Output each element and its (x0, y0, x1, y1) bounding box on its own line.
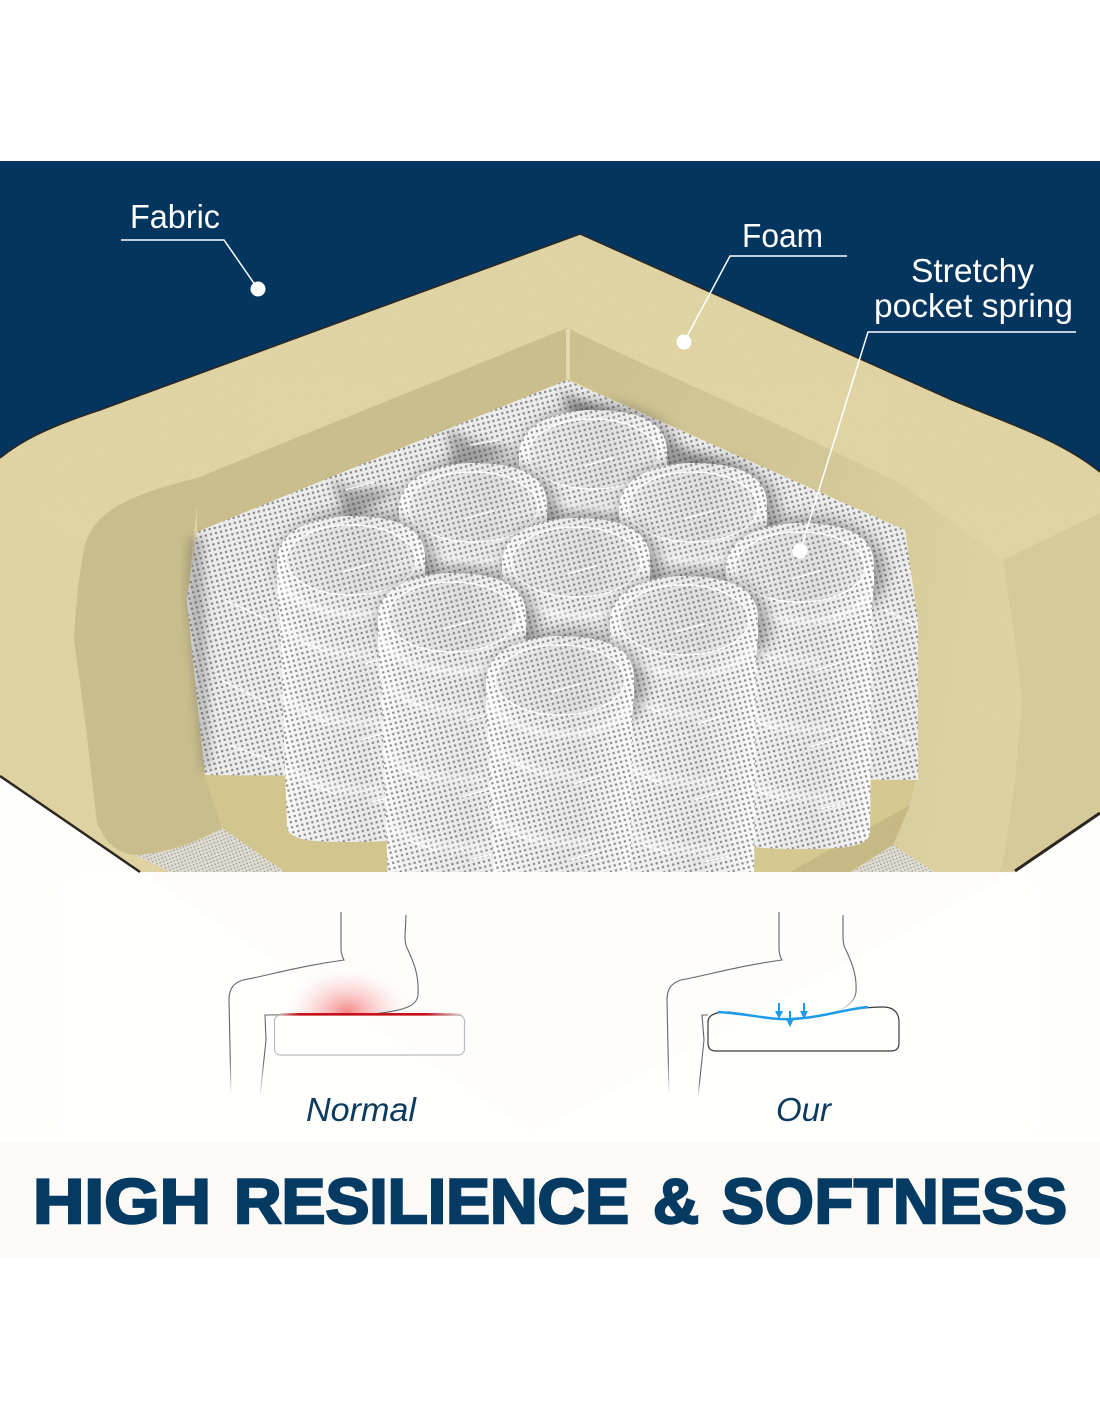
navy fabric background (0, 161, 1100, 581)
fabric under right (852, 845, 935, 872)
spring 5 (277, 510, 437, 842)
red pressure line (277, 1013, 463, 1016)
dark edge right (1015, 813, 1100, 871)
spring 1 (519, 404, 679, 736)
foam floor left (203, 772, 400, 872)
our cushion box (708, 1007, 899, 1051)
callout: Foam: Foam (742, 217, 823, 254)
callout: Fabric (121, 198, 266, 296)
normal cushion box (274, 1015, 464, 1055)
fabric under left (135, 828, 285, 872)
illustration: our cushion (667, 912, 899, 1097)
spring 8 (610, 570, 770, 902)
title: HIGH (33, 1167, 211, 1237)
spring 4 (502, 512, 662, 844)
blue arrows (775, 1003, 808, 1027)
dark edge left (0, 776, 140, 872)
title: RESILIENCE (234, 1167, 629, 1237)
foam floor right (740, 780, 916, 872)
label: Our: Our (776, 1091, 833, 1128)
title: SOFTNESS (722, 1167, 1067, 1237)
title (33, 1167, 1067, 1237)
seated figure outline (229, 912, 344, 1095)
pressure glow (296, 976, 398, 1013)
foam mattress frame (0, 234, 1100, 872)
seated figure outline (667, 912, 782, 1095)
foam top edge shadow line (0, 234, 1100, 472)
foam top surface (0, 234, 1100, 872)
callout: Fabric: Fabric (130, 198, 220, 235)
spring 6 (726, 517, 886, 849)
foam inner wall left (197, 328, 567, 532)
white side wedge (0, 777, 1100, 1142)
callout: Stretchy pocket spring: Stretchy (911, 252, 1035, 289)
foam wall corner highlight (566, 329, 570, 379)
blue wave line (718, 1007, 868, 1019)
foam inner column left (74, 478, 222, 855)
lower off-white background (0, 776, 1100, 1258)
spring 2 (399, 457, 559, 789)
callout: Stretchy pocket spring: pocket spring (874, 287, 1073, 324)
comparison panel (228, 912, 900, 1122)
callout: Foam (676, 217, 847, 350)
pocket springs group (187, 380, 918, 962)
foam speckle texture (0, 234, 1100, 872)
foam floor cut face (790, 805, 910, 872)
back row fabric (187, 380, 918, 780)
foam outer right face (1000, 513, 1100, 872)
foam outer left face (0, 495, 140, 872)
callout: Stretchy pocket spring (792, 252, 1076, 558)
spring 3 (619, 457, 779, 789)
spring 9 (486, 630, 646, 962)
title: & (653, 1167, 699, 1237)
label: Normal: Normal (306, 1091, 418, 1128)
illustration: normal cushion (229, 912, 464, 1097)
spring 7 (378, 567, 538, 899)
foam inner right wall and column (567, 328, 1022, 872)
